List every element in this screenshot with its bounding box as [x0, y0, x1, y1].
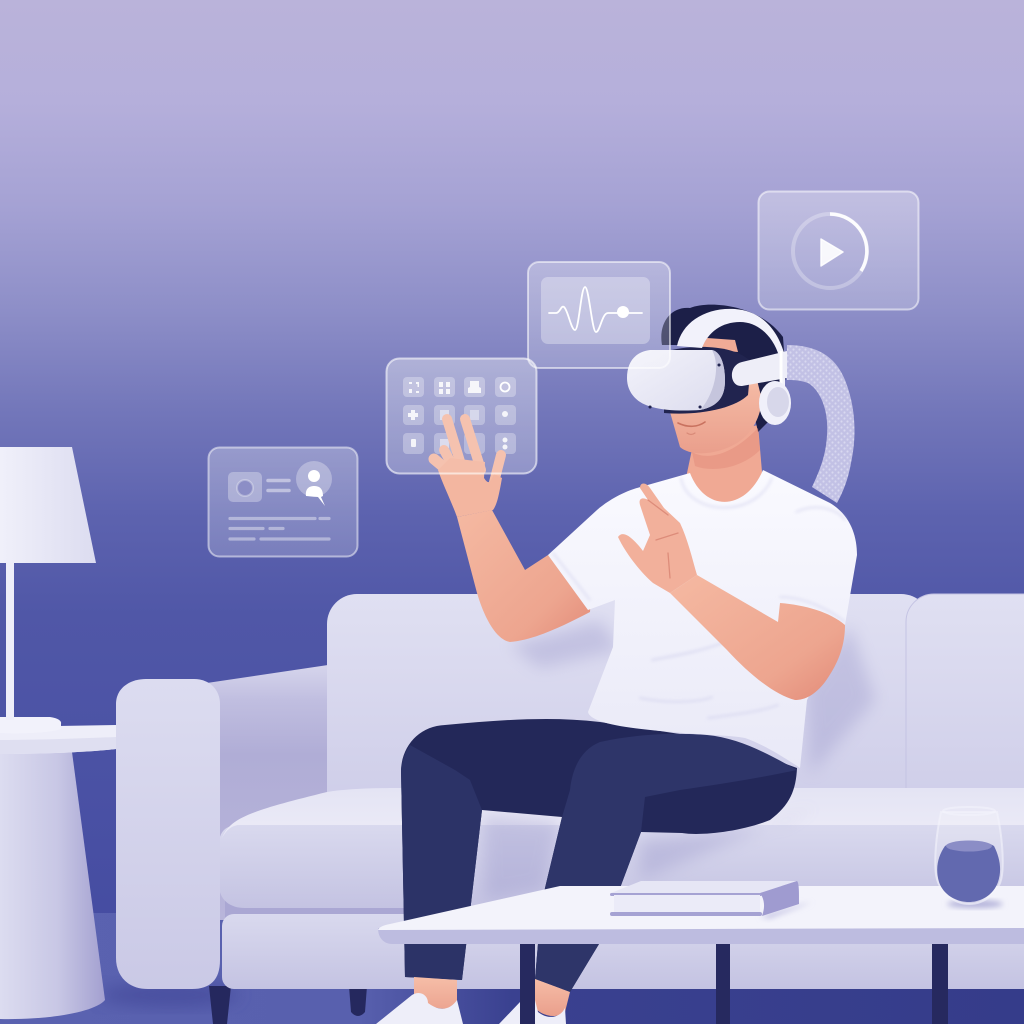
- seat gap shadow: [225, 895, 1024, 920]
- floating panel: video player: [758, 192, 918, 310]
- hand fingers: [434, 419, 501, 494]
- chin shadow on neck: [692, 428, 760, 469]
- glass of liquid: [935, 807, 1003, 908]
- book cover line: [610, 893, 762, 896]
- shirt folds: [553, 478, 845, 718]
- lamp shade: [0, 447, 96, 563]
- table legs: [520, 940, 948, 1024]
- heartbeat inner card: [541, 277, 650, 344]
- waveform: [549, 287, 642, 332]
- right hand palm and fingers: [618, 484, 697, 593]
- lamp stem: [6, 560, 14, 720]
- lamp base: [0, 717, 61, 733]
- visor screws: [650, 365, 719, 407]
- panel glass: [208, 448, 358, 556]
- ankles: [414, 977, 570, 1016]
- heartbeat panel glass: [528, 262, 670, 368]
- sofa base: [222, 914, 1024, 989]
- headset back pad with textured strap: [787, 345, 855, 503]
- liquid: [937, 841, 1000, 902]
- mouth: [678, 422, 705, 426]
- video panel glass: [758, 192, 918, 310]
- floor: [0, 913, 1024, 1024]
- book: [610, 881, 812, 918]
- face: [668, 372, 762, 453]
- avatar head: [308, 470, 320, 482]
- table front edge: [378, 928, 1024, 944]
- drop shadows on sofa: [482, 620, 875, 900]
- book top cover: [611, 881, 797, 893]
- avatar body: [306, 486, 325, 506]
- thin strap over side strap: [780, 351, 782, 390]
- shirt: [548, 470, 857, 768]
- book pages: [614, 895, 760, 913]
- visor: [627, 350, 725, 411]
- hair back: [661, 305, 786, 432]
- seat cushion top: [222, 788, 1024, 838]
- forehead: [700, 338, 738, 352]
- raised hand over grid: [434, 419, 502, 517]
- avatar: [296, 461, 332, 506]
- table top face: [378, 886, 1024, 930]
- side back panel: [200, 665, 340, 920]
- left arm, raised: [457, 510, 592, 642]
- liquid surface: [946, 840, 992, 852]
- side strap: [732, 351, 787, 386]
- app tiles: [403, 377, 516, 454]
- table top edge shade: [0, 737, 116, 754]
- avatar disc: [296, 461, 332, 497]
- floating panel: heartbeat: [528, 262, 670, 368]
- grid panel outline overlay: [386, 358, 536, 474]
- book spine: [760, 881, 799, 916]
- right arm, bent: [670, 575, 845, 700]
- floor shadow under sofa arm: [100, 983, 240, 1007]
- camera lens: [237, 480, 253, 496]
- book bottom cover: [610, 912, 762, 916]
- earcup: [759, 381, 791, 425]
- seat cushion front: [219, 825, 1024, 908]
- table pedestal: [0, 752, 105, 1019]
- top head strap: [677, 309, 785, 400]
- app glyphs: [408, 381, 510, 450]
- sofa: [116, 594, 1024, 1024]
- play triangle: [821, 239, 843, 266]
- visor side shade: [700, 350, 725, 410]
- floating panel: app grid: [386, 358, 536, 474]
- person: [376, 305, 857, 1024]
- grid panel glass: [386, 358, 536, 474]
- head: [627, 305, 791, 469]
- back cushion main: [327, 594, 931, 824]
- short lines: [268, 480, 289, 490]
- glass body: [935, 812, 1003, 904]
- earcup centre: [767, 387, 789, 417]
- neck: [680, 425, 765, 512]
- lower lip mark: [687, 433, 695, 434]
- waveform dot: [617, 306, 629, 318]
- book shadow: [760, 902, 812, 918]
- progress ring track: [793, 214, 867, 288]
- side table with lamp: [0, 447, 116, 1019]
- right hand: [618, 484, 697, 593]
- sofa arm: [116, 679, 220, 989]
- sofa feet: [209, 986, 367, 1024]
- progress ring arc: [830, 214, 867, 271]
- right hand finger creases: [648, 500, 678, 578]
- glass shadow: [947, 900, 1003, 908]
- floating panel: profile card: [208, 448, 358, 556]
- dark face gasket: [664, 347, 751, 414]
- glass rim: [943, 807, 995, 815]
- coffee table: [378, 886, 1024, 1024]
- pants silhouette: [401, 719, 797, 992]
- shoes: [376, 993, 566, 1024]
- front leg and thigh: [535, 734, 797, 992]
- camera tile: [228, 472, 262, 502]
- table top: [0, 725, 116, 754]
- hand palm: [438, 458, 502, 517]
- pants: [401, 719, 797, 992]
- back cushion right: [906, 594, 1024, 824]
- text lines: [230, 518, 329, 539]
- near leg lighter side: [401, 745, 482, 980]
